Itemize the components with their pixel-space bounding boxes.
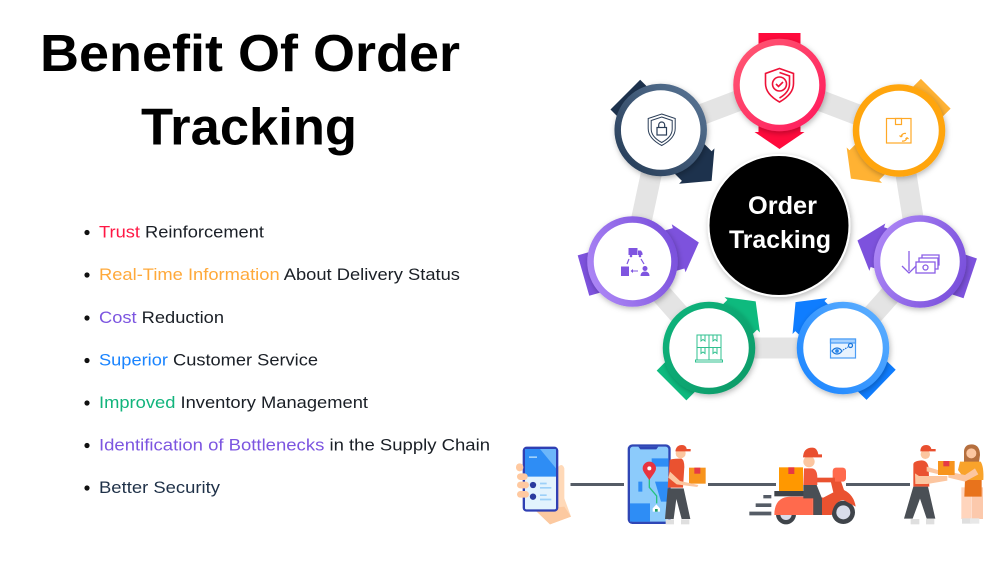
bullet: improved inventory management: Improved Inventory Management (99, 393, 368, 412)
icon: browser eye (830, 339, 856, 358)
center circle: order tracking: Tracking (729, 226, 831, 254)
node: trust shield red (736, 33, 822, 149)
bullet: cost reduction: Cost Reduction (99, 308, 224, 327)
icon: courier with map phone (628, 444, 706, 524)
icon: delivery scooter (749, 448, 856, 524)
node: customer service blue (778, 284, 898, 403)
title: Tracking (141, 98, 357, 156)
icon: money down (902, 251, 939, 273)
bullet: real-time information: Real-Time Information About Delivery Status (99, 265, 460, 284)
icon: shield lock (648, 114, 675, 146)
node: security navy (608, 77, 729, 199)
icon: supply chain (621, 248, 650, 276)
icon: handover to customer (904, 444, 983, 524)
node: inventory green (654, 284, 773, 403)
title (40, 25, 460, 156)
benefits bullet list (84, 222, 490, 497)
icon: shield check (766, 68, 794, 102)
node: real-time box orange (833, 76, 953, 196)
connector lines (570, 483, 910, 486)
icon: box refresh (886, 118, 911, 143)
center circle: order tracking: Order (748, 192, 817, 220)
grey connector ring (632, 85, 920, 348)
node: cost money purple (849, 217, 978, 304)
icon: pallet boxes (696, 335, 722, 362)
bullet: identification of bottlenecks: Identification of Bottlenecks in the Supply Chain (99, 436, 490, 454)
node: bottlenecks purple (577, 218, 706, 304)
center circle: order tracking (708, 155, 850, 296)
cycle diagram (577, 33, 978, 403)
icon: hand holding phone (516, 447, 571, 524)
bullet: trust reinforcement: Trust Reinforcement (99, 222, 264, 242)
title: Benefit Of Order (40, 25, 460, 83)
delivery process illustration (516, 444, 983, 524)
bullet: superior customer service: Superior Customer Service (99, 350, 318, 370)
bullet: better security: Better Security (99, 478, 221, 497)
